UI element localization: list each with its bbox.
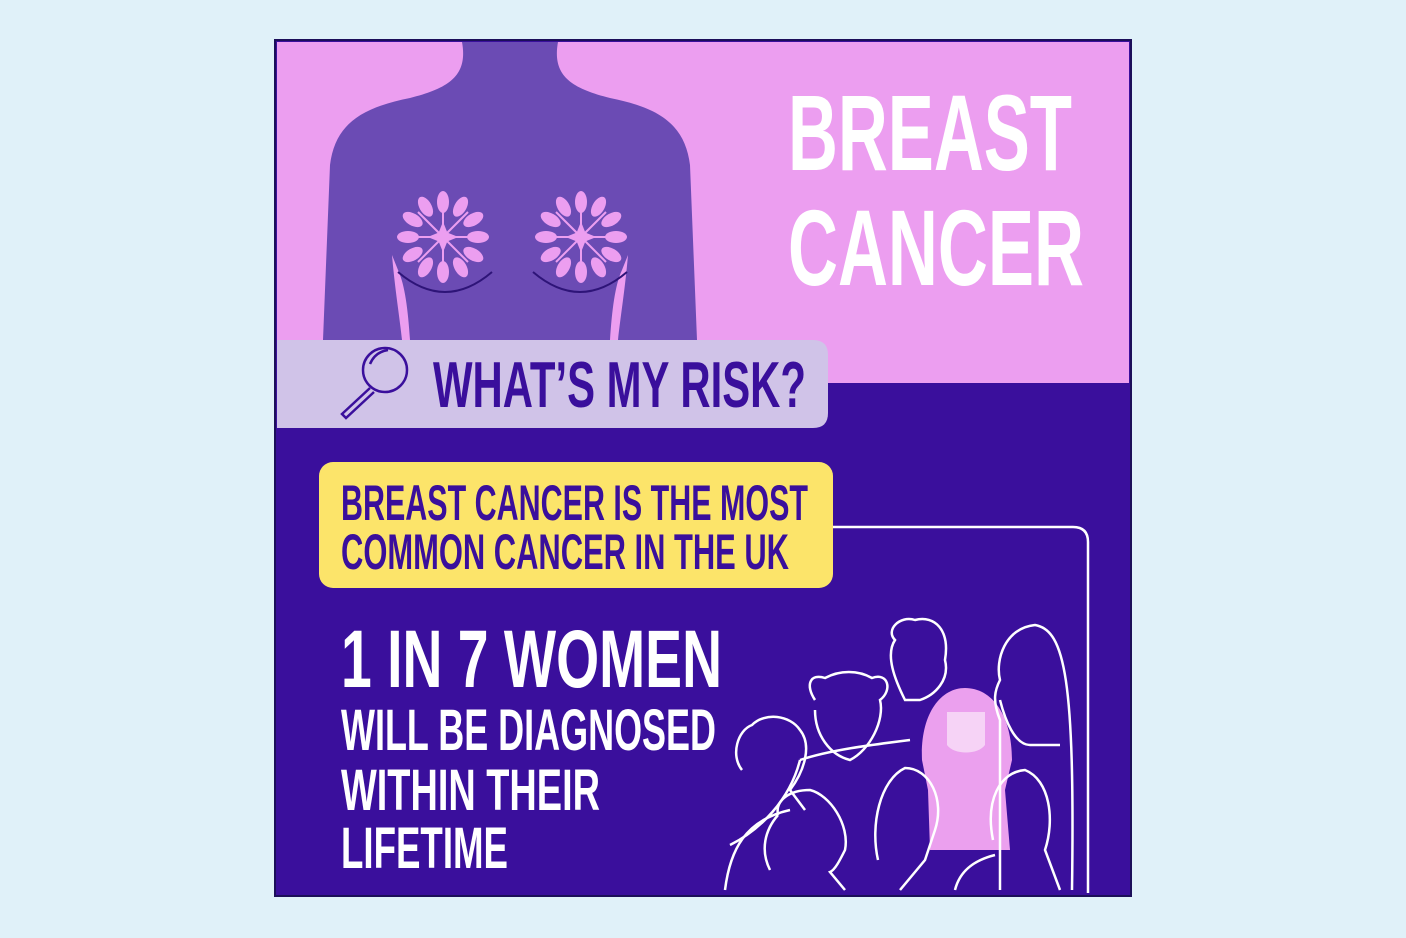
callout: yellow box: COMMON CANCER IN THE UK (341, 524, 789, 580)
icon: magnifying glass (342, 348, 407, 418)
title: CANCER (788, 187, 1084, 308)
illustration: group of women (725, 619, 1073, 890)
banner: what's my risk: WHAT’S MY RISK? (433, 348, 806, 421)
callout: yellow box (319, 462, 833, 588)
icon: flower right (535, 191, 627, 283)
frame line (833, 527, 1088, 893)
panel: card (275, 40, 1131, 896)
text: statistic (341, 614, 722, 881)
illustration: torso (323, 42, 697, 340)
banner: what's my risk (277, 340, 828, 428)
text: statistic: LIFETIME (341, 816, 508, 881)
panel: top pink (277, 42, 1129, 383)
icon: flower left (397, 191, 489, 283)
title (788, 72, 1084, 308)
woman pink highlighted (922, 688, 1012, 850)
callout: yellow box: BREAST CANCER IS THE MOST (341, 475, 808, 531)
text: statistic: 1 IN 7 WOMEN (341, 614, 722, 705)
text: statistic: WITHIN THEIR (341, 758, 600, 823)
title: BREAST (788, 72, 1072, 193)
text: statistic: WILL BE DIAGNOSED (341, 698, 716, 763)
